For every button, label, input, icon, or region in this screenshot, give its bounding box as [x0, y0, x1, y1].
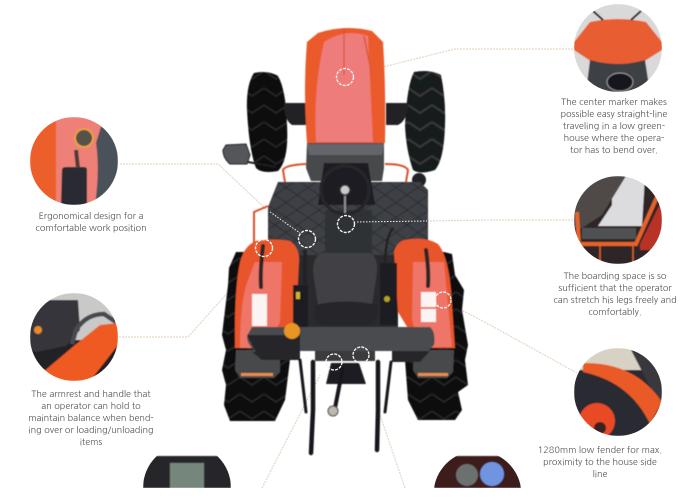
caption: center marker: house where the opera-: [564, 134, 664, 143]
right fender: [394, 239, 455, 348]
caption: center marker: [561, 98, 667, 155]
hood: [305, 28, 385, 143]
caption: center marker: traveling in a low green-: [563, 122, 665, 131]
tractor: [222, 28, 468, 453]
callout lines: [119, 49, 577, 488]
floor mat: [268, 182, 428, 262]
rear left tire: [222, 252, 290, 421]
caption: ergonomic design: comfortable work position: [35, 224, 147, 233]
photo: control lever: [30, 117, 118, 205]
caption: ergonomic design: [35, 212, 147, 233]
photo: low fender: [574, 348, 662, 439]
caption: armrest and handle: an operator can hold to: [41, 402, 141, 411]
caption: armrest and handle: The armrest and handle that: [31, 390, 151, 399]
hitch plate: [326, 363, 366, 384]
control consoles: [293, 263, 397, 328]
caption: center marker: tor has to bend over.: [570, 146, 658, 155]
photo: engine bay (cropped): [143, 456, 231, 488]
photo: boarding space: [574, 176, 662, 264]
seat: [313, 253, 378, 325]
front right tire: [405, 71, 445, 172]
dash cowl: [306, 143, 384, 181]
caption: armrest and handle: [28, 390, 154, 447]
side mirror: [223, 144, 276, 167]
caption: ergonomic design: Ergonomical design for a: [39, 212, 143, 221]
photo: center marker: [574, 4, 662, 92]
platform under seat: [294, 255, 398, 351]
photo: couplers (cropped): [434, 456, 521, 488]
photo: armrest and handle: [30, 293, 118, 381]
floor rails: [254, 164, 408, 243]
caption: boarding space: comfortably.: [588, 308, 642, 317]
caption: low fender: [538, 446, 662, 479]
left fender base: [235, 350, 280, 378]
front left tire: [247, 72, 287, 172]
caption: center marker: possible easy straight-line: [561, 110, 667, 119]
caption: boarding space: can stretch his legs freely and: [553, 296, 677, 305]
front axle: [284, 103, 408, 125]
hitch links: [300, 360, 391, 453]
caption: low fender: line: [593, 470, 607, 479]
rear bar: [247, 327, 434, 351]
steering wheel: [321, 166, 369, 214]
caption: center marker: The center marker makes: [561, 98, 667, 107]
caption: armrest and handle: items: [80, 438, 102, 447]
right fender base: [413, 350, 454, 378]
caption: boarding space: sufficient that the operator: [558, 284, 672, 293]
caption: boarding space: [553, 272, 677, 317]
amber beacon: [284, 323, 300, 339]
caption: armrest and handle: maintain balance when bend-: [28, 414, 154, 423]
caption: low fender: 1280mm low fender for max.: [538, 446, 662, 455]
caption: armrest and handle: ing over or loading/unloading: [28, 426, 154, 435]
left fender: [235, 240, 299, 348]
fuel cap: [412, 173, 426, 187]
caption: low fender: proximity to the house side: [543, 458, 657, 467]
rear right tire: [405, 252, 468, 420]
marker circles: [256, 68, 451, 370]
caption: boarding space: The boarding space is so: [564, 272, 666, 281]
